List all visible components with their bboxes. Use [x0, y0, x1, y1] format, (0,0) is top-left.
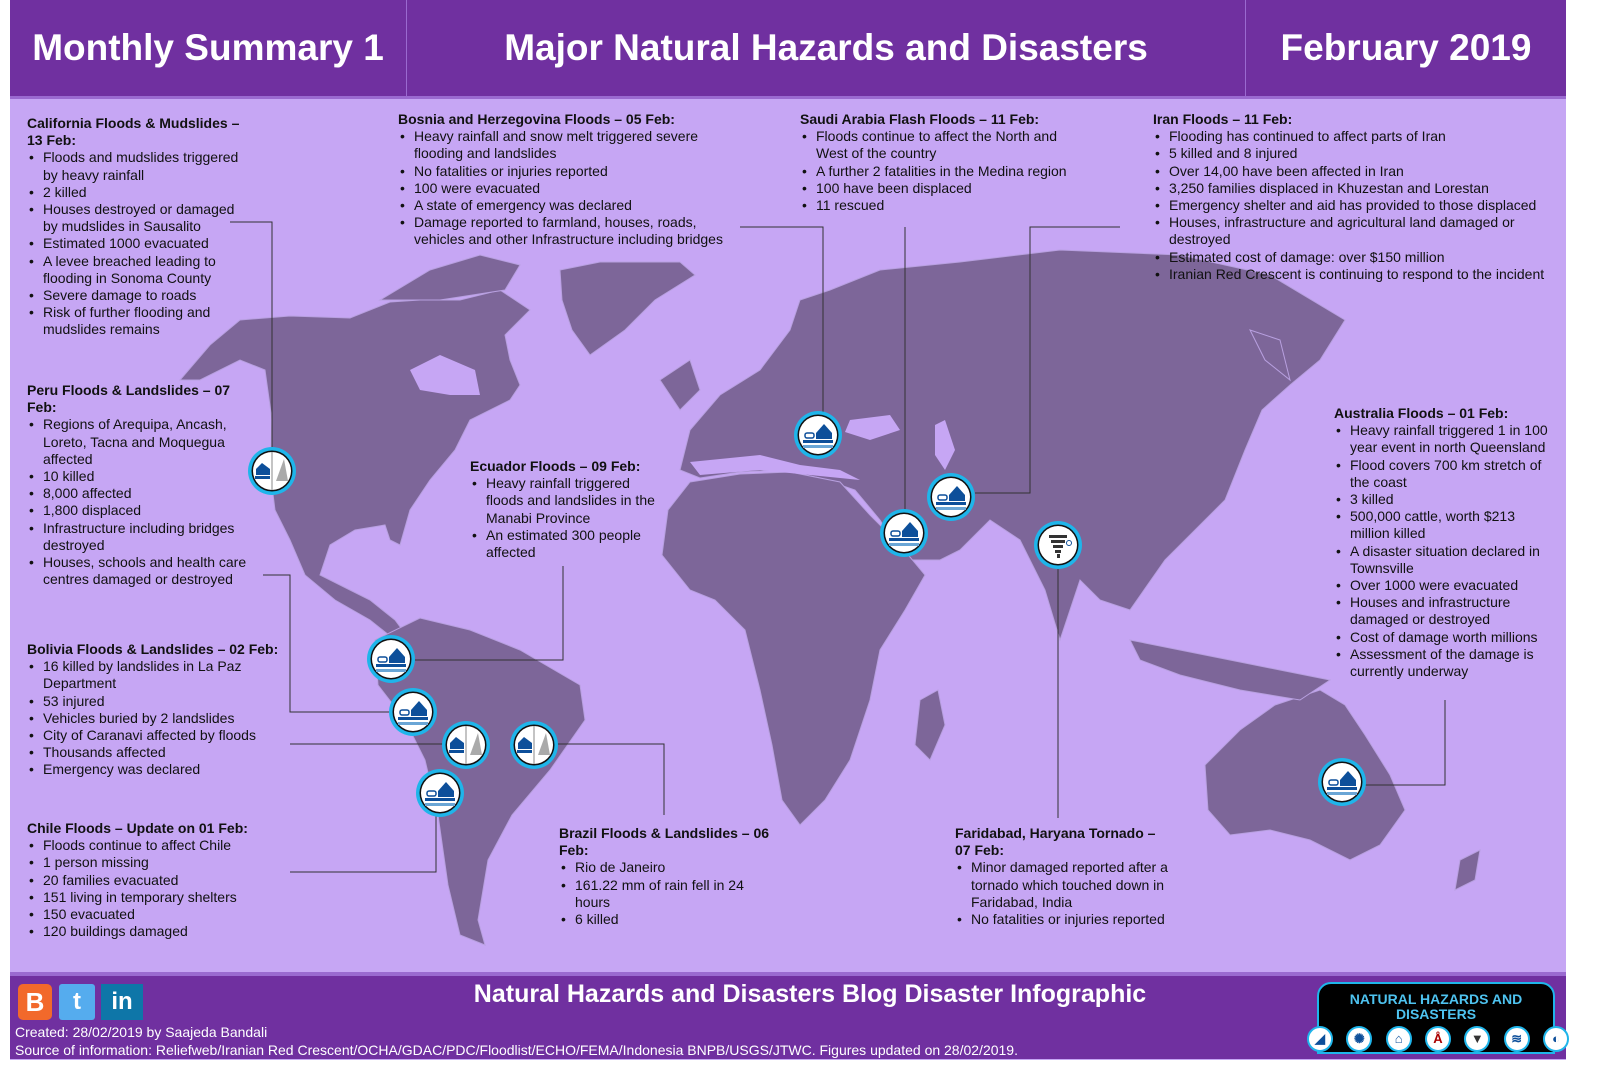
text: bosnia: No fatalities or injuries reported	[414, 163, 608, 179]
header: date	[1246, 0, 1566, 99]
text: australia: Cost of damage worth millions	[1350, 629, 1538, 645]
icon: flood australia	[1318, 758, 1366, 806]
text: bosnia: Heavy rainfall and snow melt triggered severe flooding and landslides	[414, 128, 698, 161]
text: iran: Iranian Red Crescent is continuing to respond to the incident	[1169, 266, 1544, 282]
text: saudi: Floods continue to affect the North and West of the country	[816, 128, 1057, 161]
text: chile: 150 evacuated	[43, 906, 135, 922]
text: bosnia	[398, 111, 723, 247]
text: california: A levee breached leading to flooding in Sonoma County	[43, 253, 216, 286]
logo badge: Å	[1433, 1031, 1443, 1046]
icon: blogger	[18, 984, 52, 1020]
text: peru: 10 killed	[43, 468, 94, 484]
text: peru: Infrastructure including bridges destroyed	[43, 520, 234, 553]
header: title	[407, 0, 1246, 99]
text: brazil	[559, 825, 769, 927]
text: ecuador: An estimated 300 people affected	[486, 527, 641, 560]
credits: Created: 28/02/2019 by Saajeda Bandali	[15, 1024, 267, 1040]
text: bolivia: City of Caranavi affected by floods	[43, 727, 256, 743]
text: chile: Chile Floods – Update on 01 Feb:	[27, 820, 248, 836]
text: chile: 151 living in temporary shelters	[43, 889, 237, 905]
text: iran: Iran Floods – 11 Feb:	[1153, 111, 1292, 127]
text: chile: 1 person missing	[43, 854, 149, 870]
text: california: Houses destroyed or damaged by mudslides in Sausalito	[43, 201, 234, 234]
header: title: Major Natural Hazards and Disasters	[504, 27, 1148, 68]
icon: landslide brazil	[510, 721, 558, 769]
icon: linkedin: in	[111, 988, 133, 1015]
footer	[10, 972, 1566, 1059]
text: faridabad: Minor damaged reported after a tornado which touched down in Faridabad, India	[971, 859, 1168, 910]
text: chile: 120 buildings damaged	[43, 923, 188, 939]
text: iran: Estimated cost of damage: over $150 million	[1169, 249, 1444, 265]
logo badge: ⌂	[1395, 1031, 1403, 1046]
logo badge: NATURAL HAZARDS AND	[1350, 991, 1522, 1007]
icon: blogger: B	[26, 987, 44, 1017]
text: chile: 20 families evacuated	[43, 872, 178, 888]
text: brazil: 6 killed	[575, 911, 619, 927]
icon: tornado	[1034, 521, 1082, 569]
text: california: Risk of further flooding and mudslides remains	[43, 304, 210, 337]
logo badge: ◢	[1315, 1031, 1325, 1046]
text: australia: Heavy rainfall triggered 1 in 100 year event in north Queensland	[1350, 422, 1548, 455]
text: ecuador: Heavy rainfall triggered floods and landslides in the Manabi Province	[486, 475, 655, 526]
text: faridabad: Faridabad, Haryana Tornado – 07 Feb:	[955, 825, 1155, 858]
text: california	[27, 115, 239, 337]
text: peru: Regions of Arequipa, Ancash, Loreto, Tacna and Moquegua affected	[43, 416, 227, 467]
text: iran: Over 14,00 have been affected in Iran	[1169, 163, 1404, 179]
text: saudi: 11 rescued	[816, 197, 884, 213]
text: australia: 500,000 cattle, worth $213 million killed	[1350, 508, 1515, 541]
text: ecuador	[470, 458, 655, 560]
icon: flood iran	[927, 473, 975, 521]
text: peru: 1,800 displaced	[43, 502, 141, 518]
icon: twitter: t	[73, 988, 81, 1015]
text: saudi: 100 have been displaced	[816, 180, 972, 196]
text: bosnia: A state of emergency was declared	[414, 197, 632, 213]
text: california: California Floods & Mudslides – 13 Feb:	[27, 115, 239, 148]
logo badge: ▼	[1471, 1031, 1484, 1046]
header: monthly summary	[10, 0, 407, 99]
text: bolivia: Bolivia Floods & Landslides – 02 Feb:	[27, 641, 278, 657]
text: bolivia	[27, 641, 278, 777]
text: saudi: Saudi Arabia Flash Floods – 11 Feb:	[800, 111, 1039, 127]
credits	[15, 1024, 1018, 1058]
icon: linkedin	[101, 984, 143, 1020]
text: saudi	[800, 111, 1067, 213]
text: chile	[27, 820, 248, 939]
text: chile: Floods continue to affect Chile	[43, 837, 231, 853]
text: faridabad	[955, 825, 1168, 927]
text: california: Estimated 1000 evacuated	[43, 235, 209, 251]
text: australia: Flood covers 700 km stretch of the coast	[1350, 457, 1541, 490]
text: iran: Flooding has continued to affect parts of Iran	[1169, 128, 1446, 144]
text: iran	[1153, 111, 1544, 282]
text: australia: A disaster situation declared in Townsville	[1350, 543, 1540, 576]
credits: Source of information: Reliefweb/Iranian Red Crescent/OCHA/GDAC/PDC/Floodlist/ECHO/FEMA/Indonesia BNPB/USGS/JTWC. Figures updated on 28/02/2019.	[15, 1042, 1018, 1058]
text: brazil: 161.22 mm of rain fell in 24 hours	[575, 877, 744, 910]
footer: ◐	[1552, 1031, 1560, 1046]
icon: twitter	[59, 984, 95, 1020]
text: bolivia: 16 killed by landslides in La Paz Department	[43, 658, 241, 691]
footer title: Natural Hazards and Disasters Blog Disaster Infographic	[474, 980, 1146, 1008]
text: australia: Australia Floods – 01 Feb:	[1334, 405, 1508, 421]
text: brazil: Rio de Janeiro	[575, 859, 665, 875]
logo badge: ≋	[1511, 1031, 1522, 1046]
text: ecuador: Ecuador Floods – 09 Feb:	[470, 458, 640, 474]
text: australia: Over 1000 were evacuated	[1350, 577, 1518, 593]
text: australia: Houses and infrastructure damaged or destroyed	[1350, 594, 1510, 627]
text: iran: 3,250 families displaced in Khuzestan and Lorestan	[1169, 180, 1489, 196]
text: california: Floods and mudslides triggered by heavy rainfall	[43, 149, 238, 183]
icon: flood peru	[389, 688, 437, 736]
text: iran: 5 killed and 8 injured	[1169, 145, 1297, 161]
logo badge: DISASTERS	[1396, 1006, 1476, 1022]
text: peru: 8,000 affected	[43, 485, 131, 501]
icon: flood chile	[416, 769, 464, 817]
text: saudi: A further 2 fatalities in the Medina region	[816, 163, 1067, 179]
text: australia	[1334, 405, 1548, 679]
icon: flood bosnia	[794, 411, 842, 459]
header: monthly summary: Monthly Summary 1	[32, 27, 384, 68]
icon: flood ecuador	[367, 635, 415, 683]
icon: flood saudi	[880, 509, 928, 557]
text: bolivia: 53 injured	[43, 693, 104, 709]
text: brazil: Brazil Floods & Landslides – 06 Feb:	[559, 825, 769, 858]
text: bolivia: Thousands affected	[43, 744, 166, 760]
text: peru: Houses, schools and health care centres damaged or destroyed	[43, 554, 246, 587]
text: california: 2 killed	[43, 184, 87, 200]
text: bolivia: Vehicles buried by 2 landslides	[43, 710, 234, 726]
icon: flood california/peru	[248, 447, 296, 495]
text: iran: Emergency shelter and aid has provided to those displaced	[1169, 197, 1536, 213]
text: faridabad: No fatalities or injuries reported	[971, 911, 1165, 927]
logo badge: ✺	[1354, 1031, 1365, 1046]
header: date: February 2019	[1281, 27, 1531, 68]
text: australia: 3 killed	[1350, 491, 1394, 507]
text: australia: Assessment of the damage is currently underway	[1350, 646, 1534, 679]
text: peru: Peru Floods & Landslides – 07 Feb:	[27, 382, 230, 415]
text: peru	[27, 382, 246, 587]
text: bolivia: Emergency was declared	[43, 761, 200, 777]
text: california: Severe damage to roads	[43, 287, 196, 303]
text: bosnia: Damage reported to farmland, houses, roads, vehicles and other Infrastructure including bridges	[414, 214, 723, 247]
icon: landslide bolivia	[442, 721, 490, 769]
text: iran: Houses, infrastructure and agricultural land damaged or destroyed	[1169, 214, 1515, 247]
text: bosnia: 100 were evacuated	[414, 180, 540, 196]
logo badge	[1317, 982, 1555, 1054]
text: bosnia: Bosnia and Herzegovina Floods – 05 Feb:	[398, 111, 675, 127]
